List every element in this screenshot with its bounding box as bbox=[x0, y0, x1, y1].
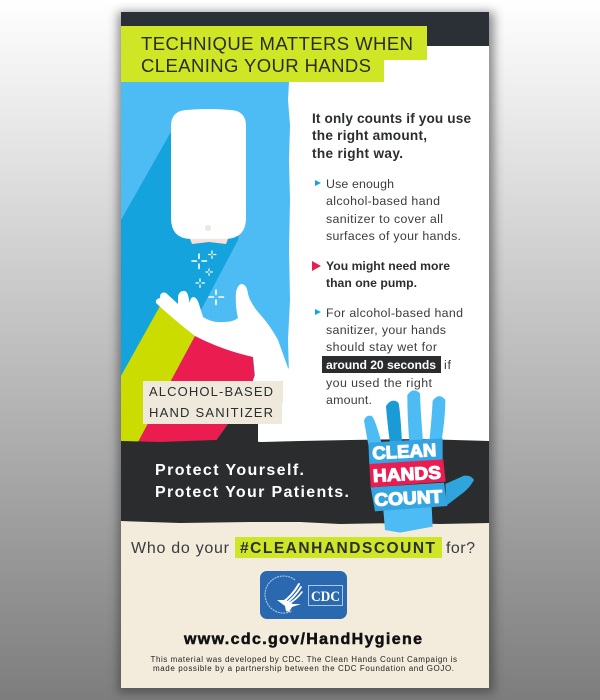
lime shape bbox=[121, 306, 196, 442]
intro text: the right way. bbox=[312, 146, 403, 161]
bullet: use enough: Use enough bbox=[326, 177, 394, 191]
label: alcohol-based hand sanitizer: HAND SANITIZER bbox=[149, 405, 273, 420]
bullet: more than one pump: than one pump. bbox=[326, 276, 417, 290]
bullet: stay wet 20 seconds: sanitizer, your hands bbox=[326, 323, 446, 337]
icon: sanitizer sparkles bbox=[192, 251, 224, 304]
dark banner: Protect Yourself. bbox=[155, 462, 304, 479]
website url: www.cdc.gov/HandHygiene bbox=[183, 631, 422, 648]
bullet: stay wet 20 seconds: amount. bbox=[326, 393, 372, 407]
panel drop shadow bbox=[118, 12, 494, 693]
crimson shape bbox=[138, 336, 258, 442]
credit text: made possible by a partnership between the CDC Foundation and GOJO. bbox=[153, 664, 454, 673]
logo: clean hands count glove: HANDS bbox=[372, 462, 441, 486]
logo: clean hands count glove bbox=[364, 390, 474, 533]
illustration panel: sanitizer dispenser bbox=[121, 82, 489, 444]
intro text: It only counts if you use bbox=[312, 111, 471, 126]
bullet: use enough: surfaces of your hands. bbox=[326, 229, 461, 243]
credit text: This material was developed by CDC. The Clean Hands Count Campaign is bbox=[150, 655, 457, 664]
bullet: use enough bbox=[315, 177, 461, 243]
bullet: use enough: sanitizer to cover all bbox=[326, 212, 443, 226]
bullet: stay wet 20 seconds: if bbox=[444, 358, 452, 372]
bullet: stay wet 20 seconds: For alcohol-based hand bbox=[326, 306, 463, 320]
logo: CDC bbox=[260, 571, 347, 619]
logo: CDC: CDC bbox=[311, 589, 340, 605]
hashtag line: for? bbox=[446, 540, 475, 557]
bullet: use enough: alcohol-based hand bbox=[326, 194, 440, 208]
white text panel edge bbox=[288, 82, 489, 442]
hashtag line: Who do your bbox=[131, 540, 230, 557]
top dark band bbox=[121, 12, 489, 46]
label: alcohol-based hand sanitizer: ALCOHOL-BASED bbox=[149, 384, 273, 399]
icon: dispenser bottle bbox=[171, 109, 246, 244]
logo: clean hands count glove: CLEAN bbox=[372, 440, 437, 463]
bullet: stay wet 20 seconds: around 20 seconds bbox=[326, 358, 436, 372]
bullet: stay wet 20 seconds: you used the right bbox=[326, 376, 433, 390]
dark banner bbox=[121, 439, 489, 524]
bullet: more than one pump bbox=[312, 259, 450, 290]
cream footer panel bbox=[121, 518, 489, 688]
label: alcohol-based hand sanitizer bbox=[143, 381, 283, 424]
title: TECHNIQUE MATTERS WHEN bbox=[141, 33, 413, 54]
intro text: the right amount, bbox=[312, 128, 427, 143]
title bbox=[121, 26, 427, 82]
icon: open hand bbox=[156, 284, 292, 444]
dark banner: Protect Your Patients. bbox=[155, 484, 349, 501]
logo: clean hands count glove: COUNT bbox=[374, 486, 443, 510]
dispenser shadow bbox=[121, 130, 240, 376]
hashtag line: #CLEANHANDSCOUNT bbox=[240, 540, 436, 557]
bullet: stay wet 20 seconds bbox=[315, 306, 463, 407]
intro text bbox=[312, 111, 471, 161]
hashtag line bbox=[131, 537, 475, 558]
bullet: stay wet 20 seconds: should stay wet for bbox=[326, 340, 437, 354]
title: CLEANING YOUR HANDS bbox=[141, 55, 371, 76]
credit text bbox=[150, 655, 457, 673]
dark corner bbox=[215, 424, 262, 442]
poster bbox=[121, 12, 489, 688]
bullet: more than one pump: You might need more bbox=[326, 259, 450, 273]
